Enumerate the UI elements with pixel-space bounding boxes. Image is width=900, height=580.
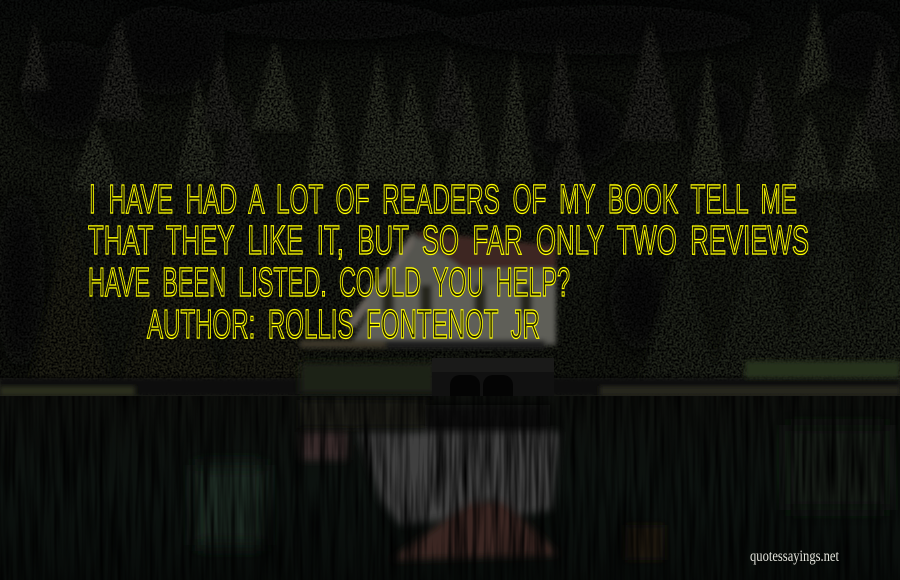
dark forest patches — [0, 0, 900, 370]
watermark: quotessayings.net — [750, 548, 839, 565]
background photo: forest — [0, 0, 900, 400]
background photo: house — [300, 232, 556, 349]
lit olive tree clusters — [70, 0, 880, 190]
quote text — [88, 176, 809, 347]
background photo: lake reflection — [0, 396, 900, 580]
left side trees — [30, 200, 310, 385]
background photo: shoreline and dock — [0, 358, 900, 415]
right side trees — [640, 190, 900, 385]
author line: AUTHOR: ROLLIS FONTENOT JR — [147, 301, 540, 347]
background texture — [0, 0, 900, 395]
